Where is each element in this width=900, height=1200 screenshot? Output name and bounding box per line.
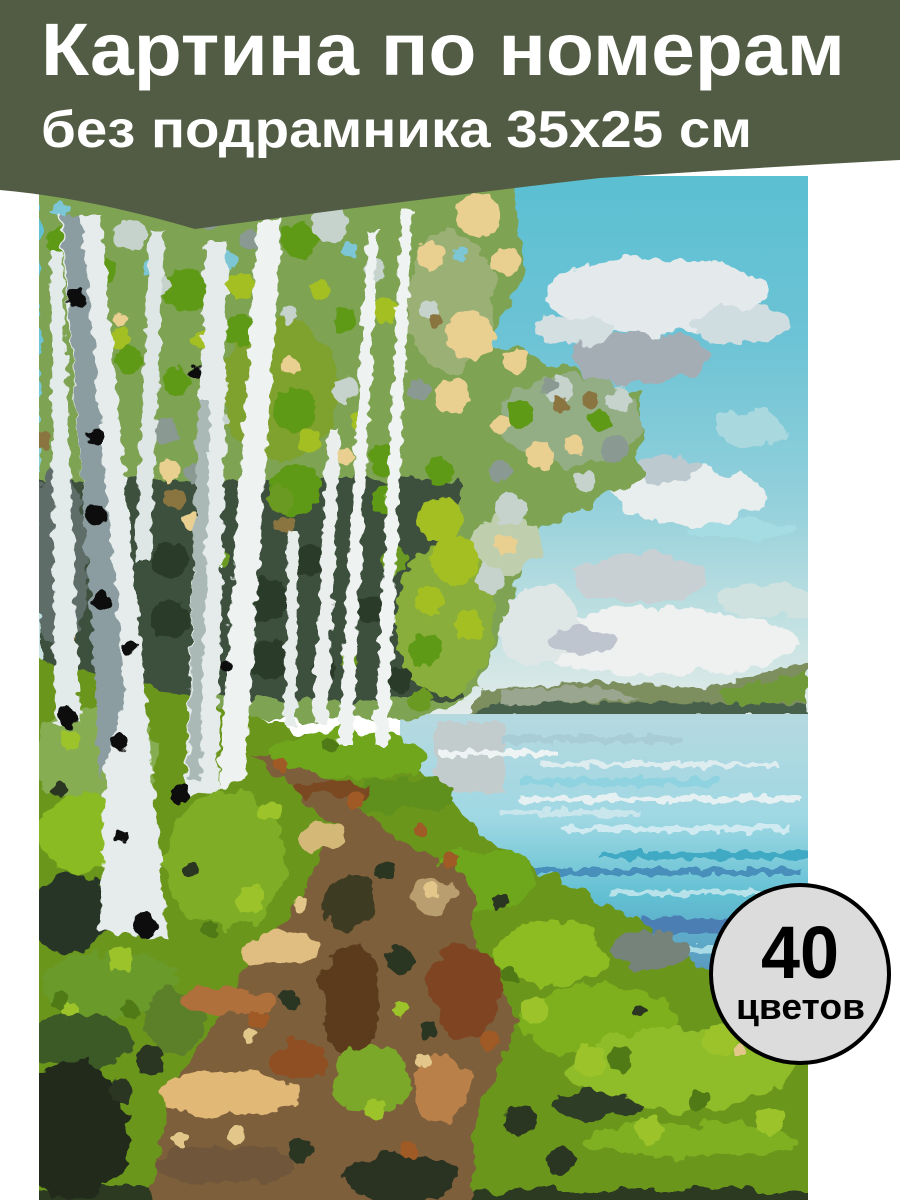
ground paint mosaic: [52, 730, 784, 1174]
lake ripples: [435, 722, 808, 953]
canopy paint mosaic: [30, 178, 632, 712]
header banner: [0, 0, 900, 229]
lake: [400, 714, 808, 974]
painting: birch grove by the lake: [20, 176, 830, 1200]
forest canopy and understory: [30, 176, 640, 720]
badge: number of colours: цветов: [736, 986, 865, 1027]
ground: dirt path: [150, 750, 520, 1200]
badge: number of colours: [711, 885, 889, 1063]
birch bark marks: [58, 289, 233, 937]
title: Картина по номерам: [41, 8, 845, 91]
badge: number of colours: 40: [761, 911, 839, 994]
clouds: [500, 257, 820, 674]
birch trunks: [50, 210, 412, 940]
far shore: [470, 662, 808, 716]
ground: grass: [39, 1184, 808, 1200]
subtitle: без подрамника 35х25 см: [41, 101, 752, 159]
sky: [39, 176, 808, 716]
